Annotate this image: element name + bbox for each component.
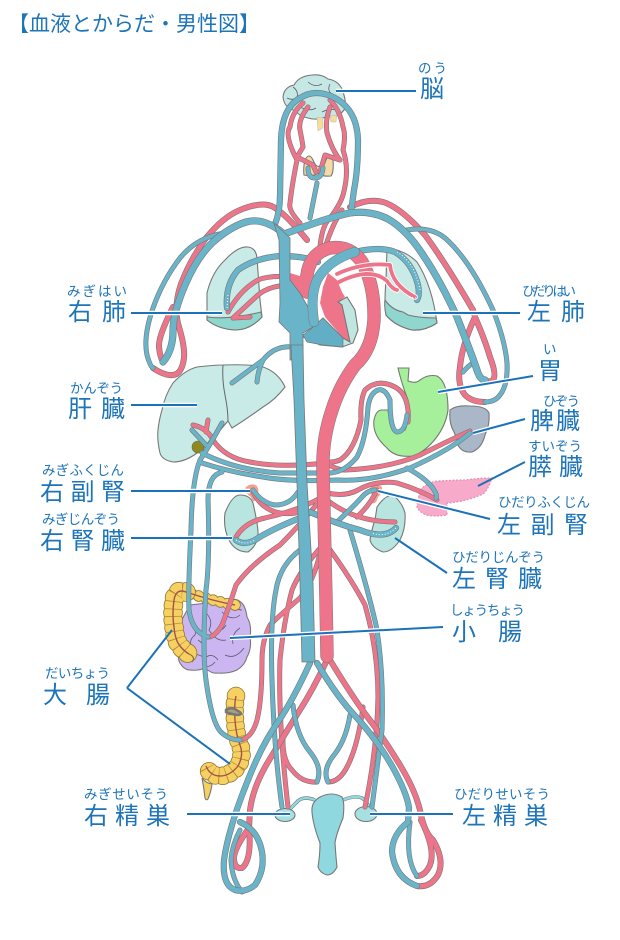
label: right kidney: みぎじんぞう [42,512,120,527]
label: left gonad: 左 精 巣 [462,803,548,830]
label: right adrenal: みぎふくじん [42,463,124,478]
label: pancreas: すいぞう [528,439,582,454]
label: stomach: い [543,342,556,357]
organ: brain [283,75,345,119]
label: right kidney [40,512,232,555]
label: right lung [67,284,222,326]
organ: uterus [275,794,377,875]
organ: descending colon [206,696,242,776]
organ: pituitary [317,115,337,131]
label: liver: かんぞう [70,381,123,396]
label: left adrenal: 左 副 腎 [497,512,588,539]
title: 【血液とからだ・男性図】 [8,13,260,36]
vessels: right pulmonary veins [337,264,415,297]
organ: thyroid [304,156,333,176]
label: brain [336,61,447,103]
vessel: inferior vena cava [291,345,315,662]
organ: ascending colon [173,591,235,662]
label: left adrenal [378,491,590,539]
label: small intestine: 小 腸 [452,619,522,646]
label: liver [68,381,197,423]
label: stomach [438,342,562,392]
organ: gallbladder [192,441,204,453]
label: left lung: ひだりはい [522,284,576,299]
label: spleen [473,394,580,435]
vessels: thick red arteries [153,201,494,886]
organ: left kidney [370,495,405,552]
label: right gonad: みぎせいそう [84,787,168,802]
label: brain: 脳 [420,76,444,103]
label: left lung: 左 肺 [527,299,585,326]
label: large intestine: 大 腸 [43,682,110,709]
vessels: blue veins medium [224,93,419,891]
label: right lung: みぎはい [67,284,127,299]
vessels: thin red arteries [193,100,470,807]
capillary dotted ends [227,252,420,543]
organ: right adrenal [245,484,258,501]
organ: right kidney [224,495,258,552]
label: right gonad: 右 精 巣 [84,803,170,830]
label: right adrenal: 右 副 腎 [40,479,125,506]
label: right lung: 右 肺 [68,299,126,326]
label: stomach: 胃 [538,358,562,385]
label: pancreas: 膵 臓 [528,454,583,481]
vessels: subclavian veins [163,212,485,380]
label: small intestine: しょうちょう [450,603,525,618]
organ: heart [290,273,358,347]
label: small intestine [230,603,525,646]
organ: stomach [374,368,448,456]
label: right adrenal [40,463,250,506]
label: right kidney: 右 腎 臓 [40,528,125,555]
vessel: pulmonary trunk [313,252,355,322]
label: spleen: ひぞう [543,394,580,409]
label: left kidney: ひだりじんぞう [452,550,545,565]
organ: pancreas [417,478,492,516]
organ: liver [158,365,285,462]
label: left gonad: ひだりせいそう [454,787,550,802]
label: large intestine [43,630,230,764]
label: large intestine: だいちょう [45,666,110,681]
label: left adrenal: ひだりふくじん [498,495,590,510]
label: left gonad [370,787,550,830]
organ: rectum [202,778,212,800]
label: spleen: 脾臓 [530,408,580,435]
label: pancreas [478,439,583,486]
vessels: blue veins thin [146,168,507,892]
organ: small intestine [177,599,251,673]
organ: right lung [207,247,262,330]
label: brain: のう [418,61,447,76]
organ: left adrenal [370,485,382,503]
organ: left lung [385,248,437,330]
label: left kidney: 左 腎 臓 [452,566,542,593]
vessel: superior vena cava and right atrium [274,223,313,360]
label: left kidney [395,538,545,593]
label: left lung [423,284,585,326]
vessel: aorta [306,248,374,656]
label: right gonad [84,787,290,830]
organ: spleen [450,406,489,452]
label: liver: 肝 臓 [68,396,125,423]
